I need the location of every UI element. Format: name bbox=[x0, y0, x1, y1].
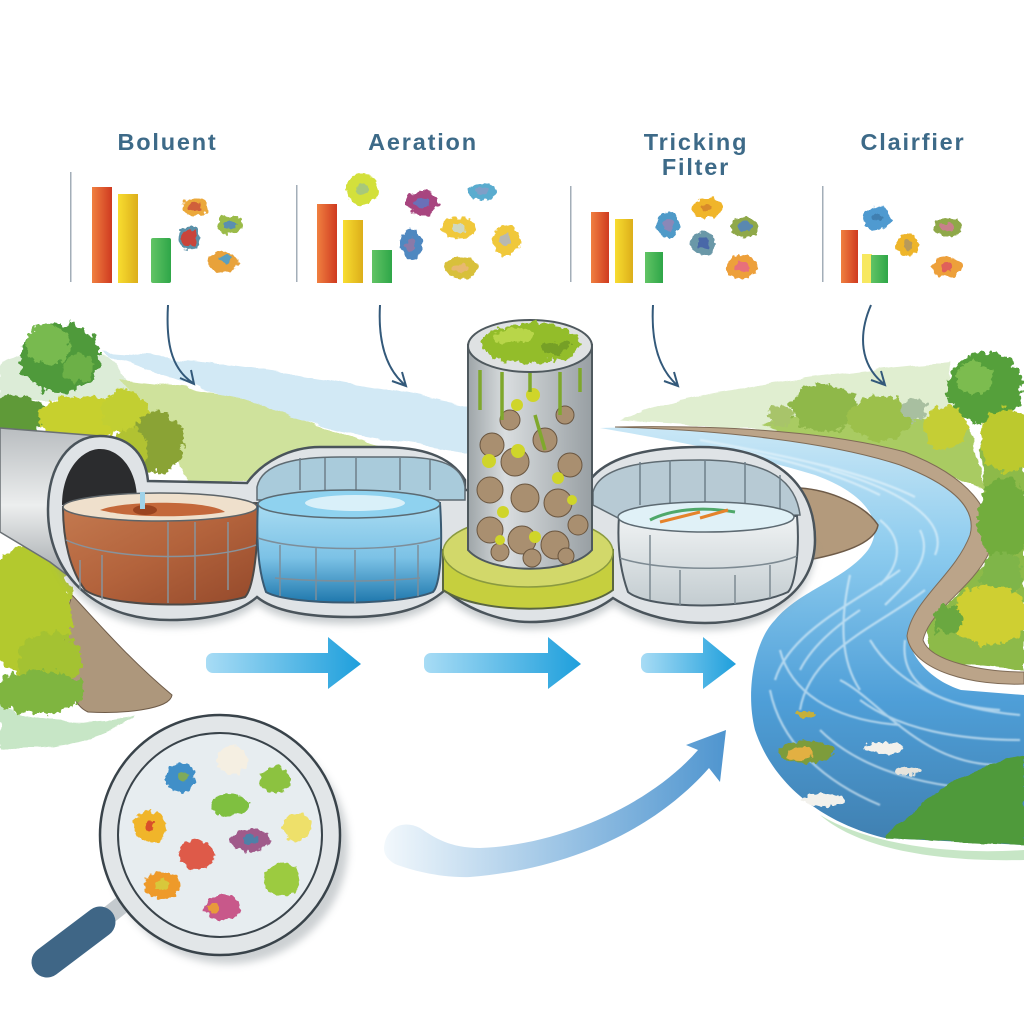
background: far river and meadow bbox=[0, 352, 1024, 670]
panel: Boluent bar chart bbox=[70, 172, 171, 283]
panel: Clairfier bar chart bbox=[822, 186, 888, 283]
microbes: Tricking Filter bbox=[657, 198, 759, 279]
lower-right shrub and wash bbox=[820, 757, 1024, 860]
title: Tricking Filter bbox=[644, 129, 748, 180]
rocks beside clarifier bbox=[800, 488, 878, 560]
river creatures bbox=[779, 711, 921, 806]
trees: right bbox=[768, 352, 1024, 645]
tower: trickling filter bbox=[468, 320, 592, 569]
lower-left shrubs and rocks bbox=[0, 546, 172, 749]
microbes: Clairfier bbox=[863, 206, 962, 277]
title: Tricking Filter: Filter bbox=[662, 154, 730, 180]
panel: Tricking Filter bar chart bbox=[570, 186, 663, 283]
arrow: flow 3 bbox=[641, 637, 736, 689]
panel: Aeration bar chart bbox=[296, 185, 392, 283]
tank: clarifier bbox=[593, 460, 800, 606]
tank: blue aeration bbox=[257, 457, 465, 603]
trees: left bbox=[0, 323, 184, 472]
river ripples bbox=[700, 440, 1020, 805]
arrow: Clairfier down bbox=[863, 305, 885, 385]
river bbox=[600, 427, 1024, 845]
arrow: curved return bbox=[384, 730, 726, 877]
title: Tricking Filter: Tricking bbox=[644, 129, 748, 155]
tank shadow bbox=[48, 517, 815, 630]
arrow: Filter down bbox=[653, 305, 678, 386]
pipe opening bbox=[62, 449, 137, 505]
pipe bbox=[0, 428, 100, 600]
microbes: Boluent bbox=[178, 198, 243, 272]
arrow: Boluent down bbox=[168, 305, 194, 384]
magnifying glass bbox=[47, 715, 348, 964]
arrow: flow 1 bbox=[206, 637, 361, 689]
tank: filter base bbox=[443, 517, 613, 609]
river bank stone wall bbox=[615, 427, 1024, 684]
microbes: Aeration bbox=[346, 173, 520, 279]
tank frame bbox=[48, 436, 815, 623]
title: Aeration: Aeration bbox=[368, 129, 478, 155]
arrow: flow 2 bbox=[424, 637, 581, 689]
title: Clairfier: Clairfier bbox=[860, 129, 966, 155]
arrow: Aeration down bbox=[380, 305, 406, 386]
tank: rusty influent bbox=[63, 492, 258, 605]
title: Boluent: Boluent bbox=[117, 129, 218, 155]
